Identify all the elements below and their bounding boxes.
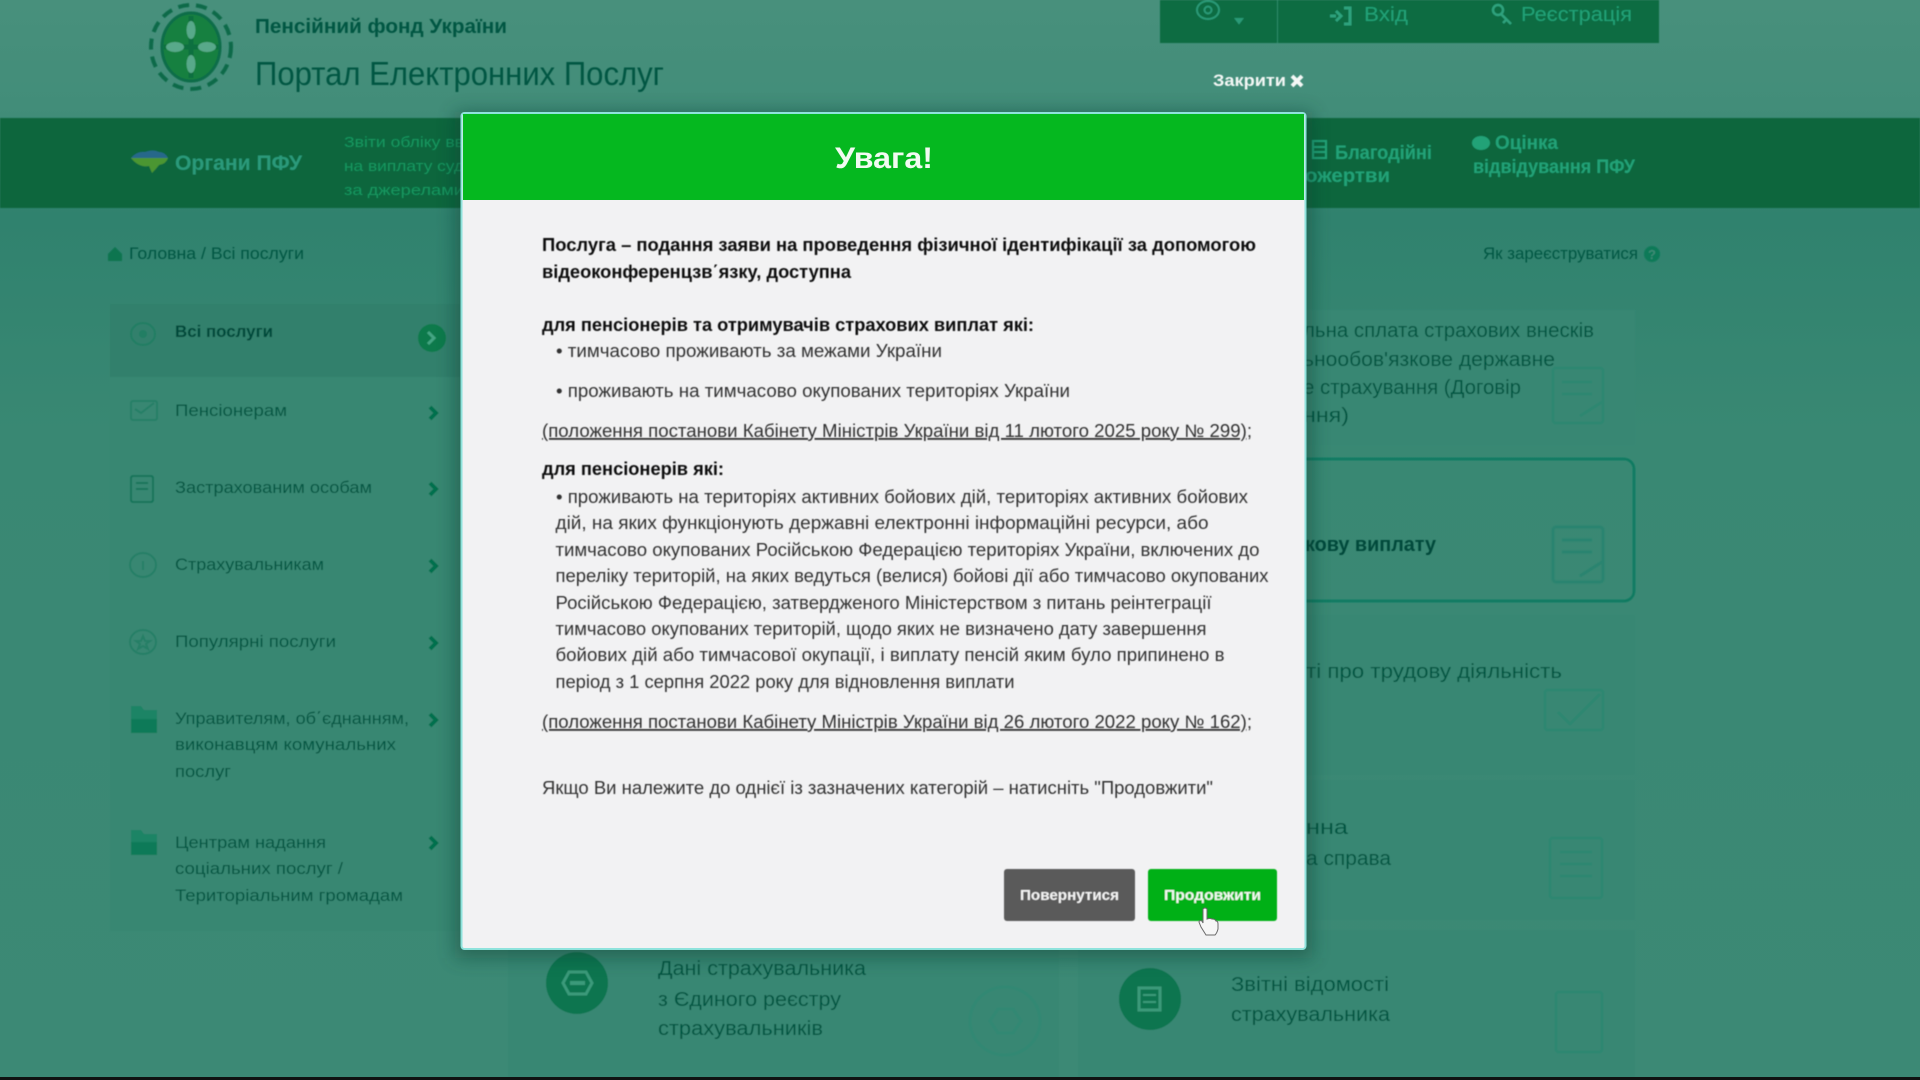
bottom black strip: [0, 1077, 1920, 1080]
nav text: reports: Звіти обліку вв: [344, 134, 464, 151]
dialog text: [542, 235, 1268, 798]
help link: ?: [1648, 247, 1656, 262]
icon: key: [1493, 5, 1511, 24]
card: selected lump-sum payment: кову виплату: [1305, 534, 1437, 556]
menu items: Територіальним громадам: [175, 886, 403, 905]
menu items: Страхувальникам: [175, 555, 324, 574]
menu items: [175, 401, 409, 905]
second category heading: для пенсіонерів які:: [542, 459, 724, 479]
top-right account bar: Вхід: [1364, 4, 1408, 26]
menu items: послуг: [175, 762, 231, 781]
dialog: attention notice: [462, 113, 1306, 949]
nav text: reports: на виплату суд: [344, 158, 464, 175]
first category heading: для пенсіонерів та отримувачів страхових виплат які:: [542, 315, 1034, 335]
nav text: visit rating: Оцінка: [1495, 133, 1558, 154]
menu item: all services: [131, 322, 446, 352]
card: electronic file: [1306, 817, 1602, 898]
nav text: charity: Благодійні: [1335, 143, 1432, 164]
second category description: переліку територій, на яких ведуться (велися) бойові дії або тимчасово окупованих: [556, 566, 1268, 586]
first category list: [556, 341, 1070, 401]
second category description: • проживають на територіях активних бойових дій, територіях активних бойових: [556, 487, 1248, 507]
menu icons: [130, 401, 157, 654]
service description: Послуга – подання заяви на проведення фізичної ідентифікації за допомогою: [542, 235, 1256, 255]
dialog shadow: [455, 112, 1312, 958]
second category description: тимчасово окупованих територій, щодо яких не визначено дату завершення: [556, 619, 1206, 639]
header: portal title: Портал Електронних Послуг: [255, 55, 664, 92]
nav text: reports: за джерелами: [344, 182, 464, 199]
service description: [542, 235, 1256, 282]
first category list: • тимчасово проживають за межами України: [556, 341, 942, 361]
menu items: Управителям, об΄єднанням,: [175, 709, 409, 728]
navigation bar: Органи ПФУ: [175, 152, 303, 175]
continue instruction: Якщо Ви належите до однієї із зазначених категорій – натисніть "Продовжити": [542, 778, 1213, 798]
icon: login: [1330, 8, 1350, 24]
card: electronic file: а справа: [1306, 848, 1392, 870]
logo: Pension Fund emblem: [151, 5, 231, 89]
service cards: [508, 310, 1635, 1077]
top-right account bar: [1160, 0, 1659, 43]
card: insurer data from the unified register: Дані страхувальника: [658, 958, 867, 980]
card: insurer data from the unified register: [546, 952, 1040, 1055]
menu icons: folders: [131, 706, 157, 855]
nav text: visit rating: відвідування ПФУ: [1473, 157, 1635, 178]
menu items: Застрахованим особам: [175, 478, 372, 497]
sidebar menu: [110, 304, 460, 931]
menu items: Пенсіонерам: [175, 401, 287, 420]
nav text: reports: [344, 134, 464, 199]
button: back: [1004, 869, 1135, 921]
card: selected lump-sum payment: [1300, 459, 1634, 601]
second category description: Російською Федерацією, затвердженого Міністерством з питань реінтеграції: [556, 593, 1212, 613]
navigation bar: [0, 118, 1920, 208]
icon: hand cursor: [1199, 908, 1218, 935]
second legal reference: (положення постанови Кабінету Міністрів України від 26 лютого 2022 року № 162);: [542, 712, 1252, 732]
card: insurer reports: страхувальника: [1231, 1004, 1391, 1026]
header: organisation name: Пенсійний фонд України: [255, 16, 507, 38]
card: insurer reports: Звітні відомості: [1231, 974, 1389, 996]
second category description: період з 1 серпня 2022 року для відновлення виплати: [556, 672, 1014, 692]
nav text: visit rating: [1472, 133, 1635, 178]
help link: Як зареєструватися: [1483, 244, 1638, 263]
menu chevrons: [430, 407, 436, 849]
card backgrounds: [508, 310, 1635, 1077]
icon: Ukraine map flag: [131, 150, 168, 173]
card: voluntary contributions: ння): [1303, 405, 1349, 427]
card: employment information: [1306, 661, 1603, 730]
button: continue: [1148, 869, 1277, 921]
breadcrumb: Головна / Всі послуги: [129, 244, 304, 263]
second category description: бойових дій або тимчасової окупації, і виплату пенсій яким було припинено в: [556, 645, 1224, 665]
dialog header: Увага!: [835, 142, 933, 175]
second category description: тимчасово окупованих Російською Федерацією територіях України, включених до: [556, 540, 1260, 560]
card: voluntary contributions: льна сплата страхових внесків: [1303, 320, 1594, 342]
menu items: соціальних послуг /: [175, 859, 343, 878]
top-right account bar: Реєстрація: [1521, 4, 1632, 26]
first legal reference: (положення постанови Кабінету Міністрів України від 11 лютого 2025 року № 299);: [542, 421, 1252, 441]
second category description: дій, на яких функціонують державні електронні інформаційні ресурси, або: [556, 513, 1208, 533]
nav text: charity: ожертви: [1305, 166, 1390, 187]
button: continue: Продовжити: [1164, 887, 1261, 904]
nav text: charity: [1305, 141, 1432, 187]
service description: відеоконференцзв΄язку, доступна: [542, 262, 852, 282]
button: back: Повернутися: [1020, 887, 1119, 904]
menu items: виконавцям комунальних: [175, 735, 397, 754]
card: insurer reports: [1119, 968, 1602, 1052]
menu items: Центрам надання: [175, 833, 326, 852]
menu item: all services: Всі послуги: [175, 322, 273, 341]
card: electronic file: нна: [1306, 817, 1349, 839]
dialog header: [463, 114, 1304, 200]
close link: Закрити: [1213, 71, 1286, 90]
icon: accessibility eye: [1197, 1, 1242, 23]
card: employment information: ті про трудову діяльність: [1306, 661, 1562, 683]
menu items: Популярні послуги: [175, 632, 336, 651]
card: voluntary contributions: ьнообов'язкове державне: [1303, 349, 1555, 371]
card: insurer data from the unified register: страхувальників: [658, 1018, 823, 1040]
card: voluntary contributions: [1303, 320, 1603, 427]
second category description: [556, 487, 1268, 692]
first category list: • проживають на тимчасово окупованих територіях України: [556, 381, 1070, 401]
card: insurer data from the unified register: з Єдиного реєстру: [658, 989, 841, 1011]
dialog body: [462, 113, 1306, 949]
card: voluntary contributions: е страхування (Договір: [1303, 377, 1521, 399]
